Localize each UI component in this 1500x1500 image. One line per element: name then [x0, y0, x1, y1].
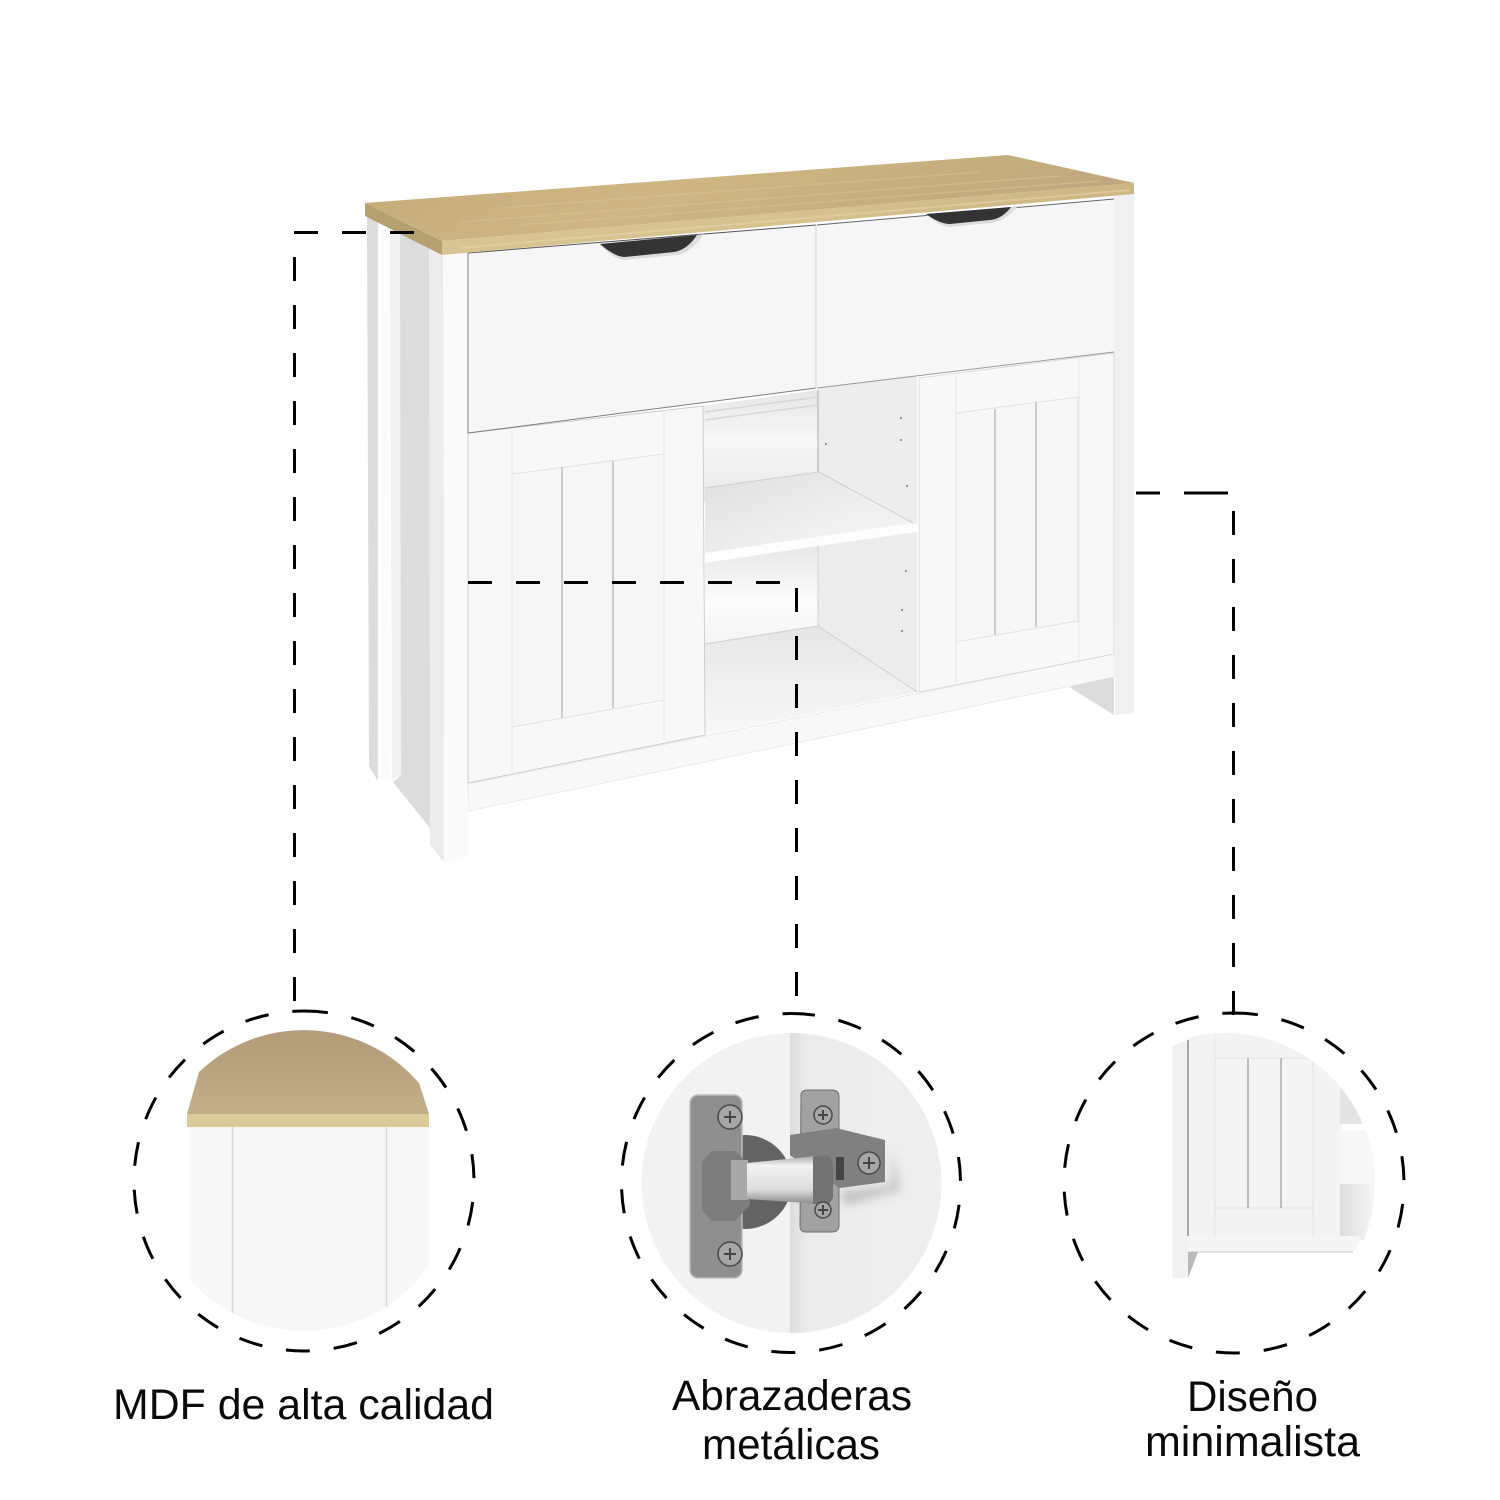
cabinet detail crop — [1172, 1030, 1380, 1278]
infographic canvas — [116, 155, 1406, 1460]
left drawer handle — [600, 234, 704, 260]
label: MDF de alta calidad: MDF de alta calidad — [113, 1381, 494, 1429]
right door — [919, 353, 1114, 692]
front left leg — [443, 252, 468, 862]
label: Diseño minimalista: minimalista — [1145, 1418, 1360, 1466]
left side panels — [367, 216, 444, 862]
white panel sample — [190, 1127, 429, 1331]
wood surface sample — [187, 1030, 429, 1114]
right drawer — [817, 199, 1114, 388]
leader line: hinges — [468, 582, 796, 997]
raised boss — [702, 1151, 750, 1221]
label: Abrazaderas metálicas: metálicas — [702, 1421, 880, 1469]
leader line: design — [1136, 493, 1234, 1015]
leader line: MDF — [294, 232, 415, 1001]
hinge arm — [747, 1156, 813, 1204]
label: Abrazaderas metálicas — [672, 1372, 912, 1469]
rail — [1188, 1236, 1362, 1252]
door cup — [698, 1135, 792, 1229]
cabinet interior background — [640, 1030, 944, 1336]
right drawer handle — [926, 206, 1018, 227]
detail circle: hinge — [622, 1014, 960, 1352]
wooden top — [365, 155, 1134, 255]
shelf peg holes — [825, 417, 908, 632]
opening — [1340, 1087, 1363, 1124]
cabinet illustration — [365, 155, 1134, 862]
detail circle: minimalist design — [1064, 1013, 1404, 1353]
left drawer — [468, 225, 816, 433]
dashed ring — [1064, 1013, 1404, 1353]
door plate — [690, 1095, 742, 1278]
screws — [718, 1105, 880, 1266]
frame bracket — [800, 1090, 839, 1232]
label: Abrazaderas metálicas: Abrazaderas — [672, 1372, 912, 1420]
dashed ring — [622, 1014, 960, 1352]
detail circle: MDF — [134, 1011, 474, 1351]
leg — [1172, 1040, 1188, 1278]
centre opening with shelf — [703, 376, 918, 735]
bottom rail — [468, 654, 1114, 811]
label: Diseño minimalista: Diseño — [1187, 1373, 1318, 1421]
hinge photo — [690, 1090, 885, 1278]
left door — [468, 406, 705, 783]
label: Diseño minimalista — [1145, 1373, 1360, 1466]
dashed ring — [134, 1011, 474, 1351]
door — [1188, 1030, 1340, 1236]
front right column and leg — [1069, 192, 1134, 715]
knuckle — [813, 1155, 833, 1204]
wood edge sample — [187, 1114, 429, 1127]
